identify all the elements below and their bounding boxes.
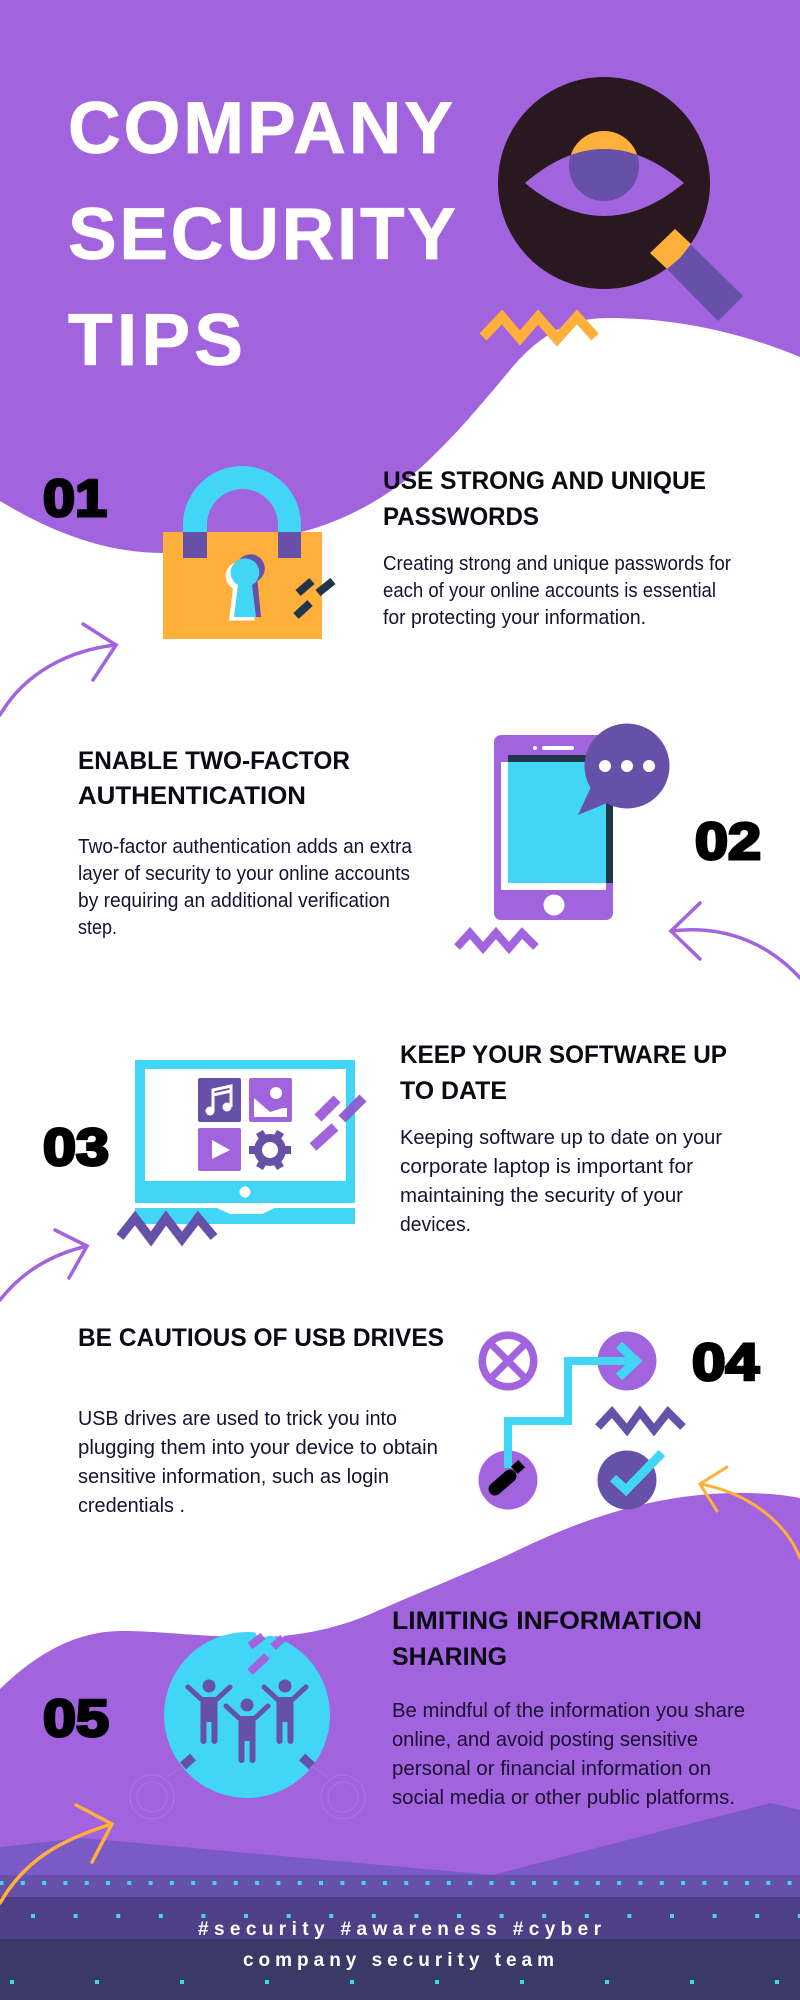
tip 1 body text: each of your online accounts is essential	[383, 580, 716, 602]
faint decorative target circles	[130, 1766, 365, 1819]
icon: magnifying glass with eye	[498, 77, 743, 321]
tip 5 heading: LIMITING INFORMATION	[392, 1607, 702, 1635]
tip 4 body text: credentials .	[78, 1495, 185, 1517]
tip 4 body text: sensitive information, such as login	[78, 1466, 389, 1488]
tip 3 body text: maintaining the security of your	[400, 1185, 683, 1207]
tip 4 body text: plugging them into your device to obtain	[78, 1437, 438, 1459]
arrow: purple to phone	[671, 903, 800, 978]
title: SECURITY	[68, 194, 456, 275]
tip 1 heading: USE STRONG AND UNIQUE	[383, 467, 706, 495]
icon: padlock	[163, 466, 333, 639]
tip 5 body text: personal or financial information on	[392, 1758, 711, 1780]
circle with check mark	[598, 1450, 656, 1510]
tip 1 heading: PASSWORDS	[383, 503, 539, 531]
title	[68, 88, 456, 381]
arrow: orange to USB	[700, 1467, 800, 1558]
app tile: music	[198, 1078, 241, 1122]
footer bands	[0, 1875, 800, 2000]
purple dashes	[313, 1098, 363, 1147]
circle with arrow	[598, 1332, 656, 1390]
tip 5 heading	[392, 1607, 702, 1671]
purple dashes	[250, 1636, 283, 1672]
tip 2 body text	[78, 836, 413, 939]
person left	[188, 1680, 230, 1741]
tip 1 body text: for protecting your information.	[383, 607, 646, 629]
number 04: 04	[692, 1334, 759, 1392]
footer text: #security #awareness #cyber	[198, 1919, 602, 1940]
tip 1 body text: Creating strong and unique passwords for	[383, 553, 731, 575]
icon: people group in cyan circle	[164, 1630, 330, 1798]
number 05: 05	[43, 1690, 109, 1748]
tip 5 body text: Be mindful of the information you share	[392, 1700, 745, 1722]
app tile: picture	[249, 1078, 292, 1122]
header purple wave	[0, 0, 800, 553]
tip 3 body text: corporate laptop is important for	[400, 1156, 693, 1178]
tip 5 body text: social media or other public platforms.	[392, 1787, 735, 1809]
tip 2 body text: step.	[78, 917, 117, 939]
tip 3 heading	[400, 1041, 727, 1105]
footer dots	[0, 1883, 800, 1982]
purple zigzag	[457, 933, 536, 948]
tip 2 body text: layer of security to your online accounts	[78, 863, 410, 885]
tip 4 body text	[78, 1408, 438, 1517]
dark purple zigzag	[120, 1218, 214, 1239]
tip 3 body text	[400, 1127, 722, 1236]
tip 2 body text: by requiring an additional verification	[78, 890, 390, 912]
title: TIPS	[68, 300, 243, 381]
icon: USB path flow	[478, 1332, 683, 1510]
tip 2 heading: ENABLE TWO-FACTOR	[78, 747, 350, 775]
tip 4 body text: USB drives are used to trick you into	[78, 1408, 397, 1430]
zigzag	[598, 1412, 683, 1430]
arrow: purple to padlock	[0, 624, 116, 715]
check mark	[613, 1453, 662, 1490]
tip 5 body text: online, and avoid posting sensitive	[392, 1729, 698, 1751]
lower purple wave	[0, 1493, 800, 2000]
arrow: orange to people	[0, 1805, 112, 1903]
background mountains	[0, 1803, 800, 1875]
footer text	[198, 1919, 602, 1971]
circle with cross	[478, 1332, 538, 1390]
person centre	[226, 1698, 268, 1760]
number 03: 03	[43, 1119, 109, 1177]
tip 1 body text	[383, 553, 731, 629]
tip 3 heading: KEEP YOUR SOFTWARE UP	[400, 1041, 727, 1069]
icon: phone with speech bubble	[494, 724, 670, 920]
tip 2 heading: AUTHENTICATION	[78, 782, 306, 810]
tip 5 heading: SHARING	[392, 1643, 507, 1671]
USB stick	[495, 1460, 525, 1489]
dark dashes	[183, 1757, 312, 1766]
tip 3 body text: Keeping software up to date on your	[400, 1127, 722, 1149]
arrow: purple to laptop	[0, 1230, 87, 1300]
tip 2 body text: Two-factor authentication adds an extra	[78, 836, 413, 858]
footer text: company security team	[243, 1950, 554, 1971]
tip 3 heading: TO DATE	[400, 1077, 507, 1105]
cyan path with arrow	[508, 1345, 636, 1468]
tip 4 heading: BE CAUTIOUS OF USB DRIVES	[78, 1324, 444, 1352]
tip 1 heading	[383, 467, 706, 531]
circle for USB stick	[478, 1450, 538, 1510]
title: COMPANY	[68, 88, 453, 169]
person right	[264, 1680, 306, 1741]
tip 2 heading	[78, 747, 350, 810]
orange zigzag	[483, 317, 595, 339]
icon: laptop with app tiles	[135, 1060, 355, 1224]
number 02: 02	[695, 813, 761, 871]
tip 5 body text	[392, 1700, 745, 1809]
tip 3 body text: devices.	[400, 1214, 471, 1236]
number 01: 01	[43, 470, 107, 528]
app tile: play	[198, 1128, 241, 1171]
icon: gear	[249, 1132, 291, 1168]
